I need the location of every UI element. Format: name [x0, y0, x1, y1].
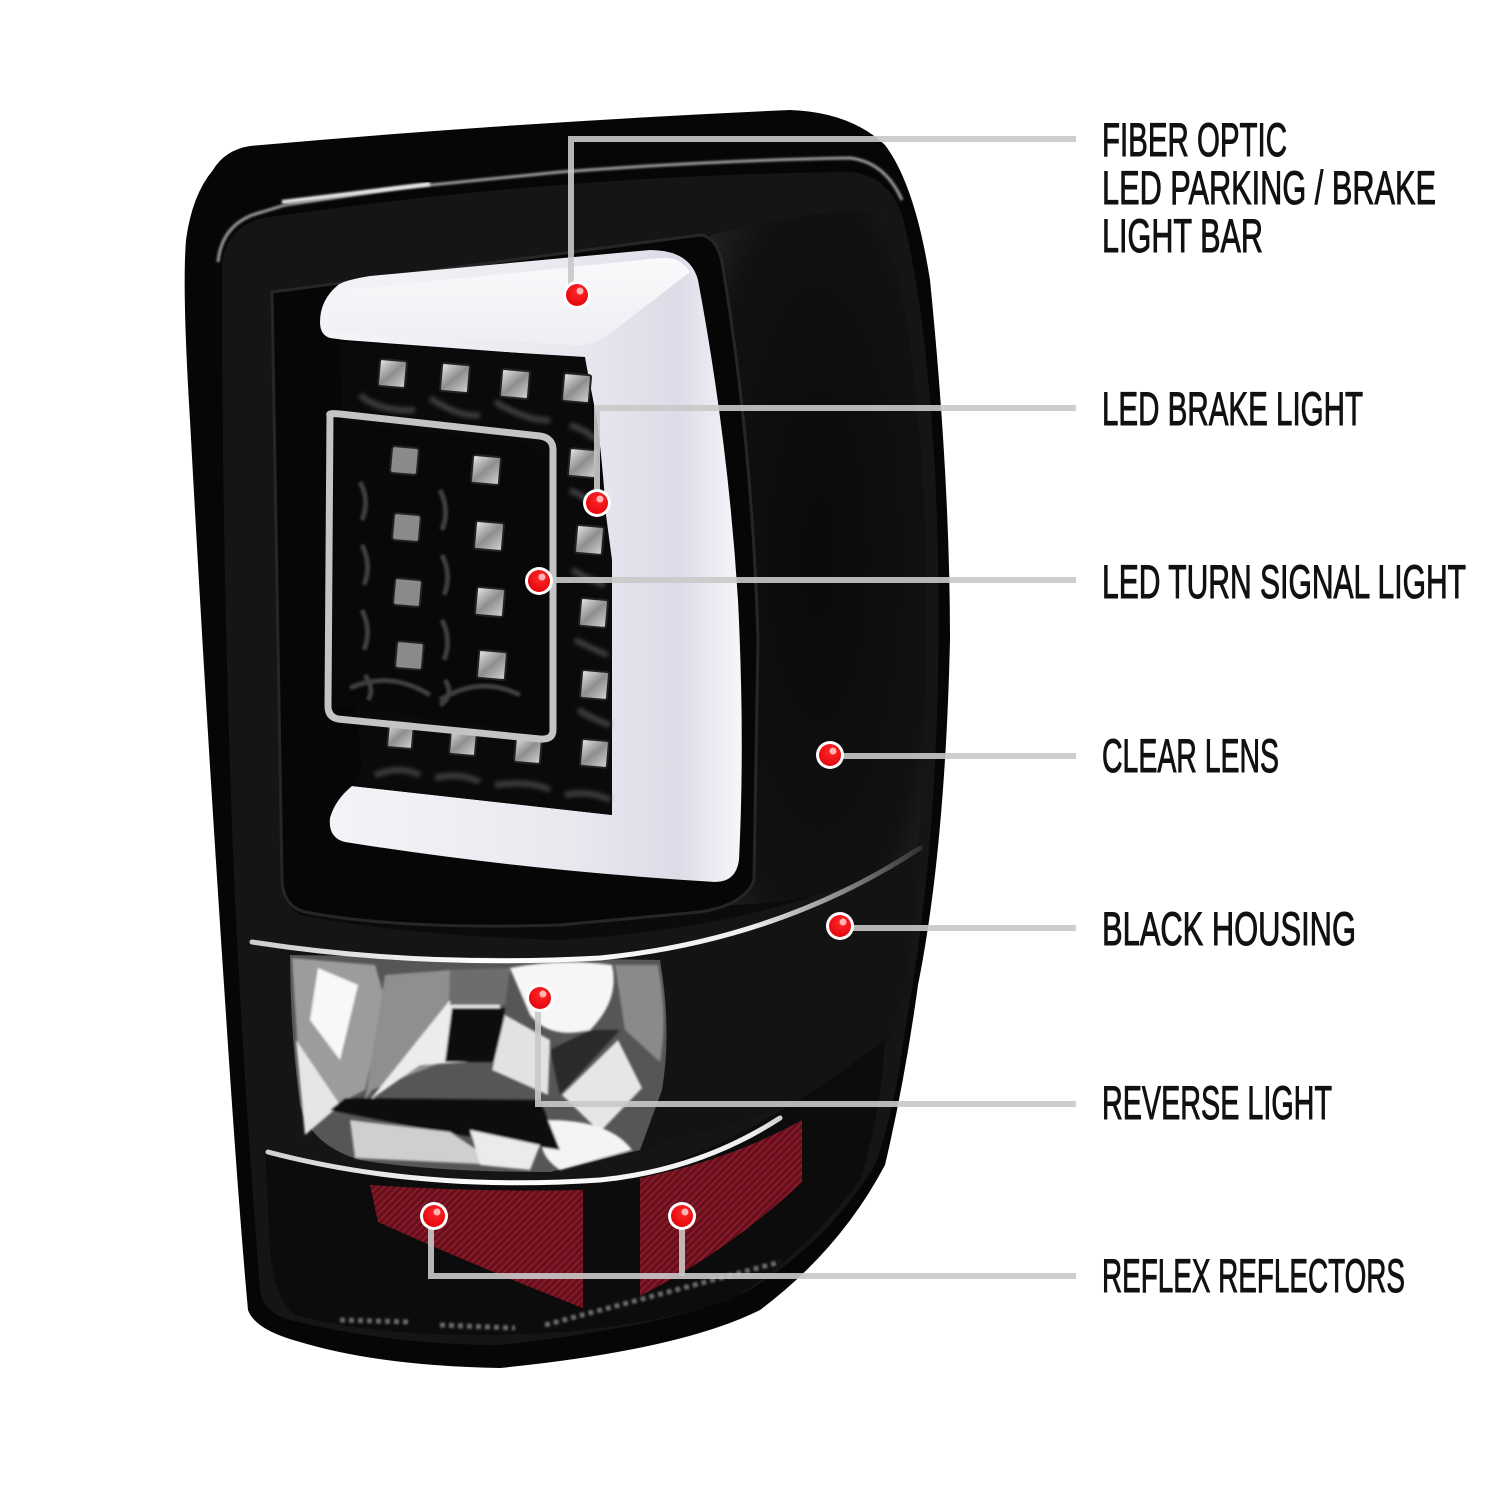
LED turn signal panel [328, 414, 553, 739]
top glass edge highlight [218, 158, 902, 262]
red reflex reflectors [370, 1120, 802, 1308]
upper clear lens arc [283, 235, 920, 940]
turn signal reflector cups [350, 482, 520, 705]
reflector facets [292, 958, 664, 1170]
reflector cups [360, 395, 610, 800]
bottom reflector panel [265, 1040, 885, 1335]
fiber optic light bar [320, 250, 742, 882]
light bar top highlight [329, 258, 690, 345]
marker dots [420, 281, 854, 1230]
label: fiber optic LED parking / brake light bar [1102, 113, 1436, 262]
reverse light lens [290, 955, 667, 1172]
inner face of housing [222, 172, 939, 1345]
lens recess [272, 235, 758, 926]
molded part text [340, 1262, 780, 1328]
label: black housing: BLACK HOUSING [1102, 902, 1356, 955]
label: fiber optic LED parking / brake light bar: FIBER OPTIC [1102, 113, 1287, 166]
LEDs [378, 359, 609, 768]
label: clear lens: CLEAR LENS [1102, 729, 1279, 782]
tail light housing [185, 110, 950, 1368]
lower panel [250, 845, 920, 1155]
LED brake light area [340, 342, 612, 815]
right lens panel [710, 210, 926, 905]
label: reverse light: REVERSE LIGHT [1102, 1076, 1332, 1129]
chrome trim strips [252, 848, 920, 1183]
label: fiber optic LED parking / brake light bar: LIGHT BAR [1102, 209, 1263, 262]
turn signal LEDs [390, 446, 507, 680]
callout leader lines [431, 139, 1076, 1276]
